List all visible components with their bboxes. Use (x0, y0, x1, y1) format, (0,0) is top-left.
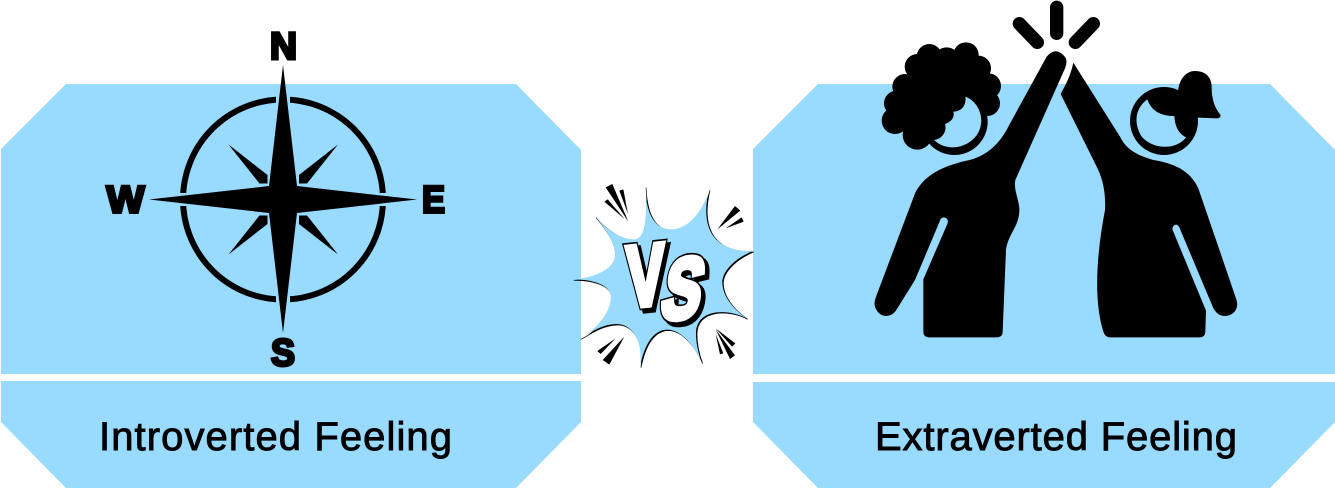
panel: right upper (753, 84, 1335, 374)
clap spark lines (1019, 7, 1093, 42)
burst shape shadow (574, 188, 754, 368)
compass letters: W (106, 180, 145, 222)
VS lettering: V (629, 230, 668, 329)
right person head and hair (1130, 71, 1221, 155)
icon: compass (106, 26, 445, 374)
burst shape (573, 187, 753, 367)
left person head and hair (882, 42, 1001, 155)
icon: VS comic burst (573, 184, 754, 368)
icon: two people high five (875, 7, 1237, 337)
left person body (875, 51, 1066, 337)
heading: Extraverted Feeling: Extraverted Feeling (875, 415, 1237, 459)
ring gaps (175, 90, 392, 310)
compass letters (106, 26, 445, 374)
VS lettering: V (626, 227, 665, 326)
diagonal points (228, 144, 338, 254)
VS lettering: V (626, 227, 665, 326)
right person body (1061, 63, 1237, 337)
panel: left lower (1, 381, 581, 488)
VS lettering: S (655, 239, 712, 338)
compass letters: S (271, 332, 295, 374)
burst ticks (597, 184, 744, 365)
VS lettering (626, 227, 716, 341)
VS lettering: S (655, 239, 712, 338)
compass star (149, 65, 417, 333)
VS lettering: S (658, 243, 716, 341)
compass letters: N (270, 26, 297, 68)
panel: right lower (753, 382, 1335, 488)
panel: left upper (1, 84, 581, 374)
compass ring (183, 100, 383, 300)
compass letters: E (422, 180, 445, 222)
heading: Introverted Feeling: Introverted Feeling (99, 415, 452, 459)
